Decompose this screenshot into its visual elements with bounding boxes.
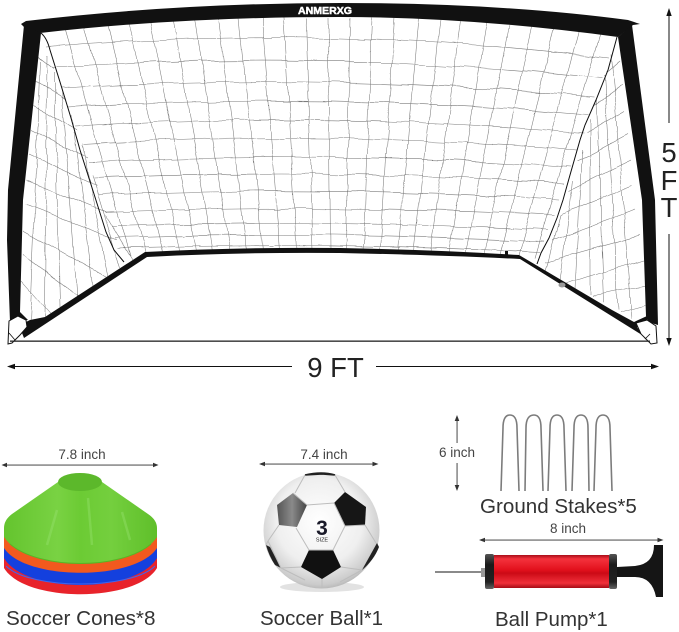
- frame: bottom bar: [22, 248, 647, 338]
- label: Ball Pump*1: [495, 608, 608, 631]
- panel: ground stakes: [439, 415, 637, 518]
- dimension: 8 inch: [479, 521, 664, 542]
- dimension: 7.8 inch: 7.8 inch: [58, 447, 106, 462]
- label: Soccer Cones*8: [6, 607, 156, 630]
- brand logo: ANMERXG: [298, 5, 352, 17]
- panel: goal net and frame: [7, 3, 658, 344]
- frame: left corner pocket: [8, 316, 27, 344]
- frame: bottom tick: [505, 251, 508, 255]
- cone stack: [4, 473, 157, 594]
- dimension: 7.8 inch: [2, 447, 158, 467]
- panel: soccer cones: [2, 447, 158, 630]
- net: back panel: [21, 18, 646, 325]
- dimension: 5 FT height: [661, 8, 678, 346]
- frame: right corner pocket: [636, 320, 657, 344]
- ball: SIZE: [316, 538, 328, 544]
- pump: [435, 545, 663, 597]
- dimension: 9 FT width: 9 FT: [307, 352, 364, 383]
- ground line: [10, 340, 650, 342]
- frame: left post: [7, 25, 41, 322]
- panel: ball pump: [435, 521, 664, 631]
- dimension: 7.4 inch: 7.4 inch: [300, 447, 348, 462]
- dimension: 6 inch: [439, 415, 475, 491]
- panel: soccer ball: [259, 447, 383, 630]
- dimension: 6 inch: 6 inch: [439, 445, 475, 460]
- frame: grey clip: [558, 282, 566, 288]
- dimension: 7.4 inch: [259, 447, 378, 466]
- label: Soccer Ball*1: [260, 607, 383, 630]
- dimension: 8 inch: 8 inch: [550, 521, 586, 536]
- label: Ground Stakes*5: [480, 495, 637, 518]
- stakes: [501, 415, 612, 491]
- ball shadow: [280, 582, 364, 592]
- dimension: 5 FT height: F: [661, 165, 677, 196]
- net: dark side seams: [41, 33, 617, 264]
- ball: [264, 472, 380, 588]
- frame: top bar: [21, 3, 640, 37]
- ball: 3: [316, 517, 328, 540]
- frame: right post: [618, 25, 658, 325]
- dimension: 5 FT height: 5: [661, 137, 677, 168]
- dimension: 9 FT width: [7, 352, 659, 383]
- dimension: 5 FT height: T: [661, 192, 678, 223]
